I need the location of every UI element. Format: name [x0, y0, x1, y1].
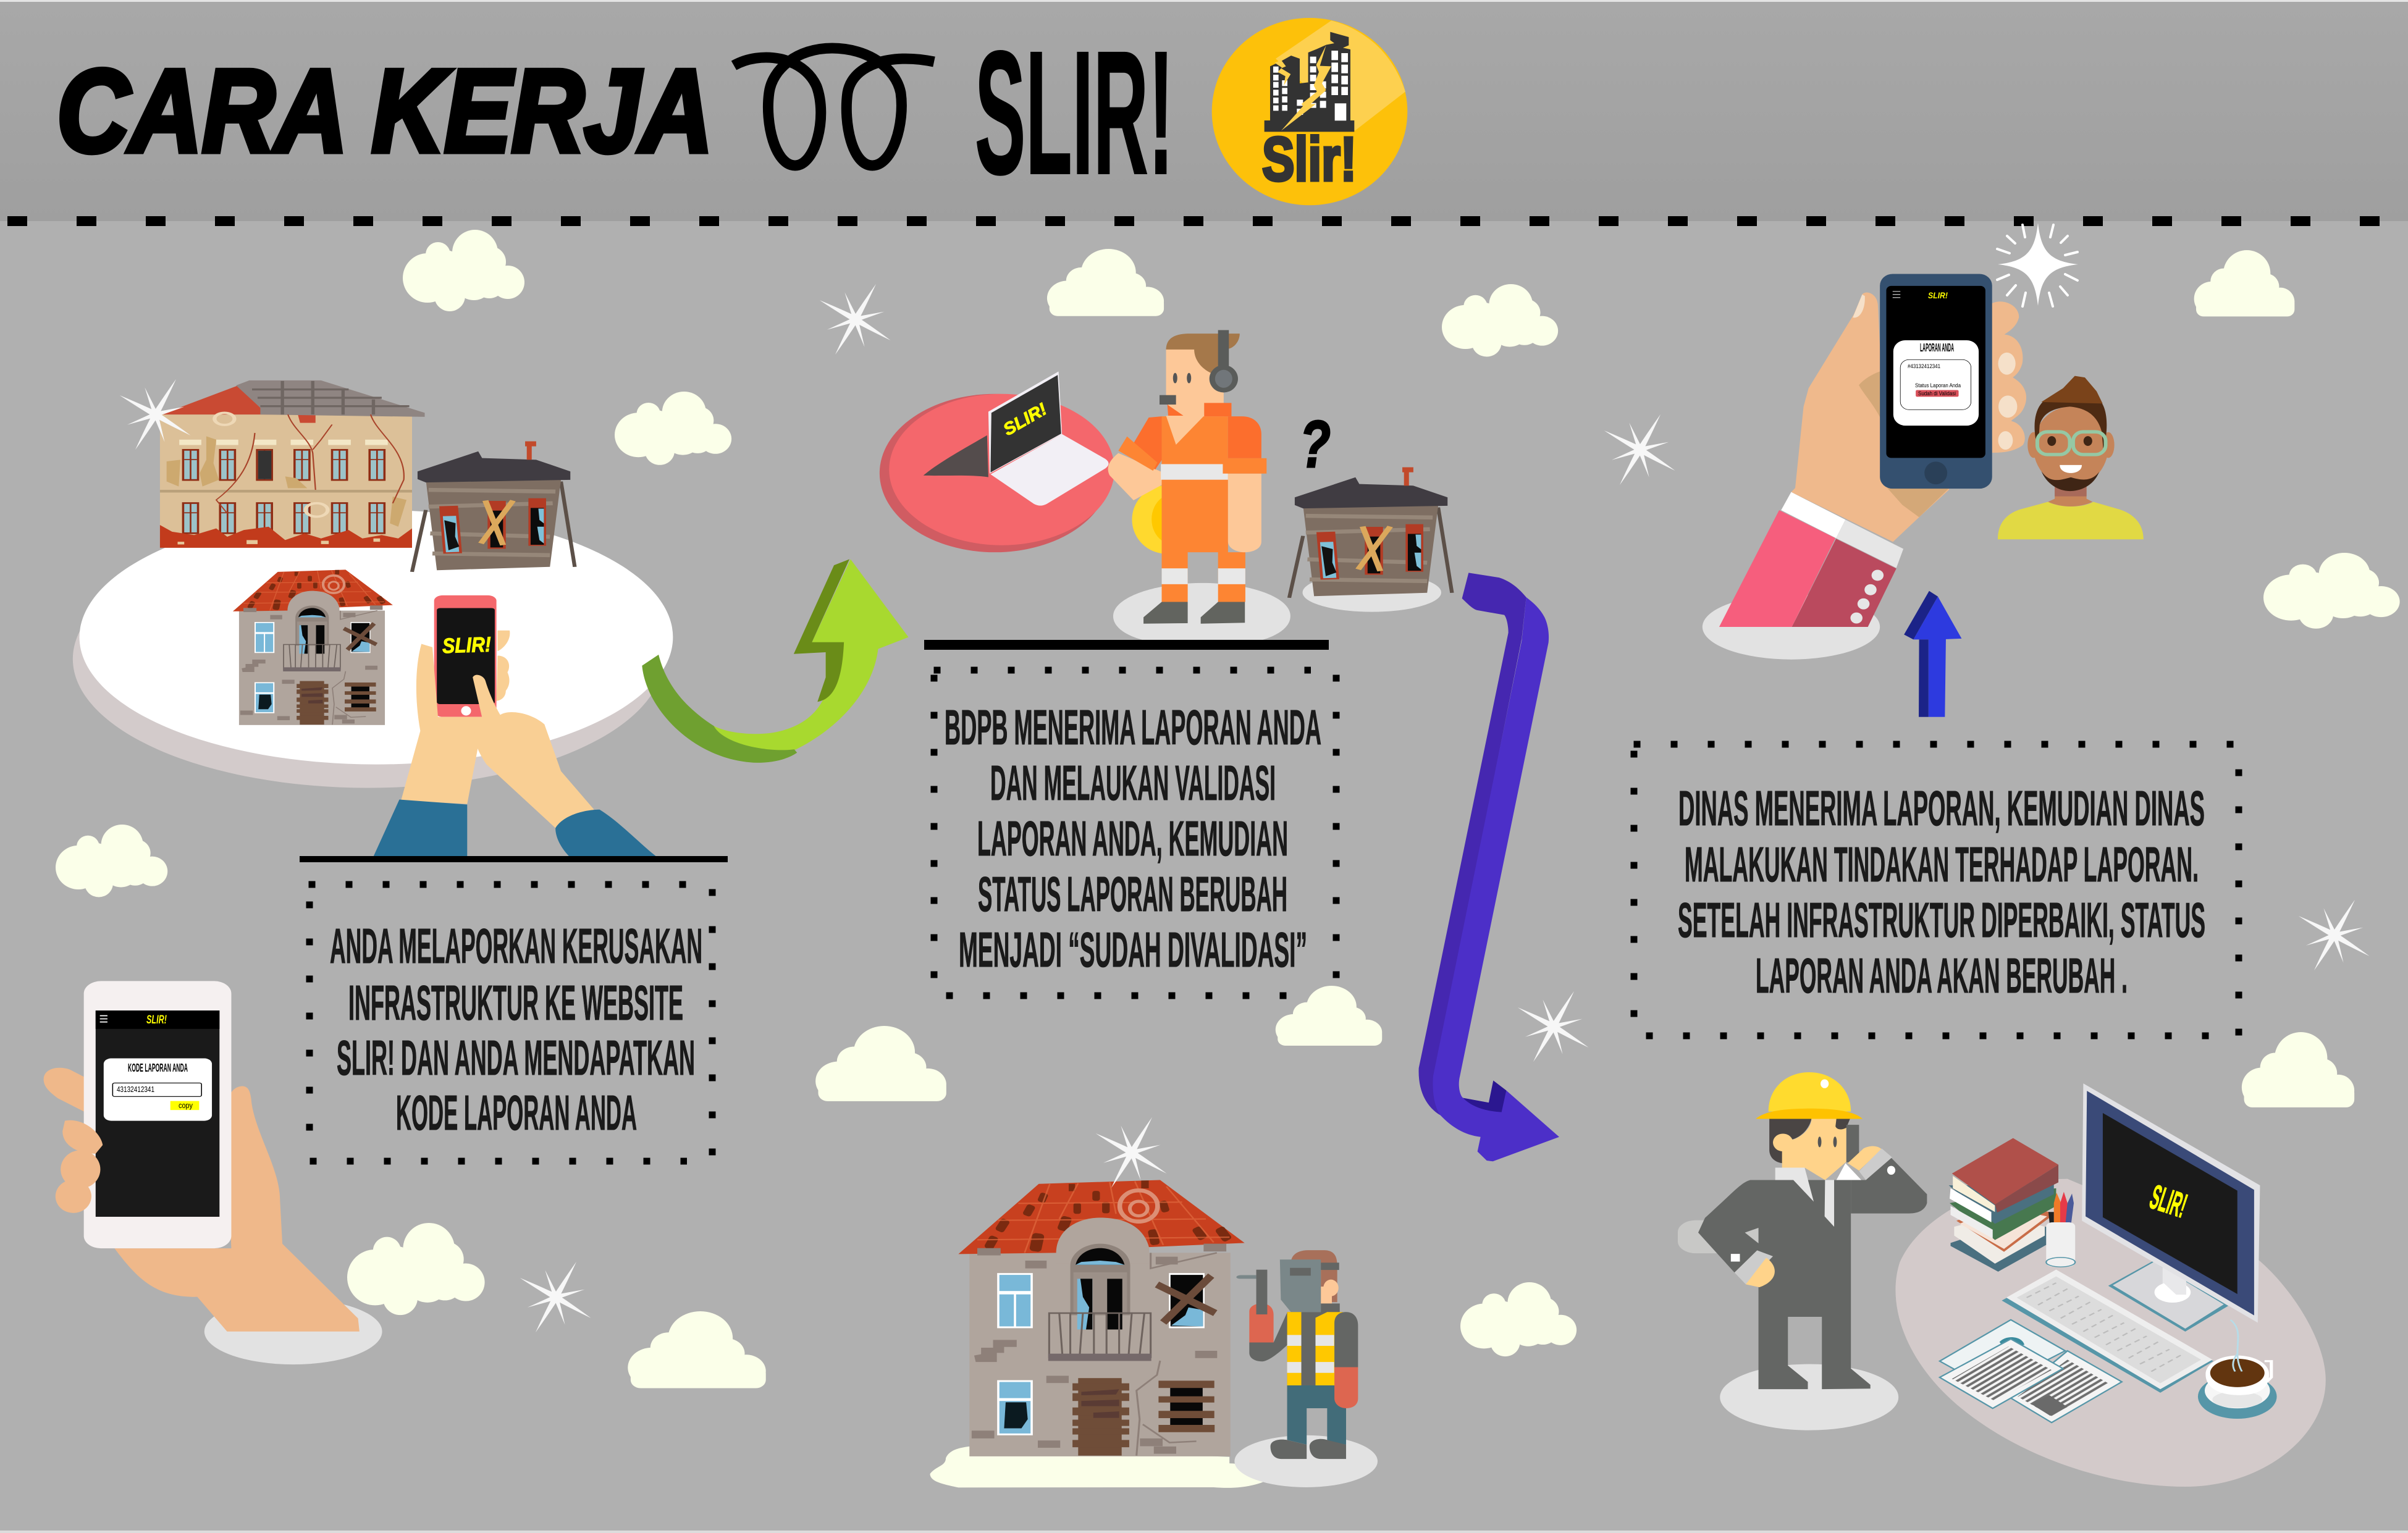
panel: step 3 house repair — [930, 1115, 1378, 1488]
text block: step 4 — [1678, 781, 2205, 1003]
documents — [1940, 1320, 2122, 1422]
cloud 11 — [347, 1223, 485, 1315]
shadow under welder — [1234, 1435, 1378, 1487]
header band — [0, 0, 2408, 221]
cloud 7 — [56, 825, 167, 897]
question mark: ? — [1300, 406, 1331, 481]
panel: step 2 operator scene — [880, 330, 1452, 640]
dotted frame: step 1 — [309, 884, 712, 1161]
dotted frame: step 2 — [934, 670, 1336, 996]
cloud 13 — [1460, 1282, 1577, 1356]
icon: four-point sparkle — [1997, 223, 2078, 306]
sparkle — [1516, 989, 1590, 1064]
panel: step 4 hand with phone status: SLIR! — [1928, 290, 1948, 300]
arrow: green curved — [642, 559, 909, 763]
arrow: purple down — [1419, 573, 1559, 1161]
welder figure — [1236, 1250, 1358, 1459]
fingers — [56, 1120, 103, 1213]
cloud 4 — [1442, 284, 1558, 356]
coffee cup — [2198, 1320, 2277, 1419]
cloud 6 — [2263, 553, 2400, 629]
operator figure — [1108, 330, 1266, 624]
text block: step 1: KODE LAPORAN ANDA — [396, 1085, 637, 1140]
text: ANDA MELAPORKAN KERUSAKAN — [330, 918, 702, 973]
damaged tan building — [160, 380, 425, 548]
engineer figure — [1678, 1072, 1927, 1389]
dashed header divider — [7, 216, 2408, 226]
shadow under engineer — [1720, 1364, 1898, 1430]
sparkle on building — [118, 377, 192, 452]
shadow ellipse — [1703, 594, 1880, 660]
laptop on red disc — [880, 371, 1114, 552]
panel: step 4 hand with phone status: LAPORAN ANDA — [1920, 342, 1954, 354]
panel: hand with phone report code: SLIR! — [146, 1014, 167, 1027]
sparkle — [518, 1260, 592, 1334]
phone body — [1880, 274, 1992, 489]
cloud 8 — [1276, 986, 1382, 1046]
helmet held — [1132, 485, 1162, 553]
laptop screen label: SLIR! — [1000, 399, 1050, 439]
sparkle — [1602, 413, 1677, 487]
dark boarded shack — [1289, 467, 1452, 598]
text block: step 2: DAN MELAUKAN VALIDASI — [990, 755, 1276, 810]
cloud 10 — [2242, 1032, 2354, 1107]
panel: step 1 report scene — [73, 377, 673, 857]
phone screen label: SLIR! — [442, 633, 492, 658]
text: STATUS LAPORAN BERUBAH — [978, 867, 1287, 922]
hand — [114, 1086, 360, 1332]
bottom edge line — [0, 1531, 2408, 1533]
shadow under shack — [1303, 573, 1441, 612]
cloud 9 — [815, 1026, 946, 1101]
icon: SLIR logo: Slir! — [1262, 125, 1357, 194]
icon: looped arrow — [734, 48, 934, 166]
sparkle — [818, 282, 892, 356]
phone body — [84, 981, 231, 1248]
sparkle — [2297, 898, 2371, 972]
panel: engineer and desk — [1678, 1072, 2326, 1487]
panel: hand with phone report code: copy — [179, 1101, 193, 1110]
text block: step 2 — [945, 700, 1321, 977]
sparkle above roof — [1094, 1115, 1168, 1190]
hand — [1791, 292, 1949, 542]
cloud base — [930, 1447, 1264, 1488]
panel: step 4 hand with phone status: Status Laporan Anda — [1915, 382, 1961, 388]
panel: step 4 hand with phone status — [1703, 223, 2144, 660]
phone in hands — [373, 595, 657, 857]
text: MENJADI “SUDAH DIVALIDASI” — [959, 922, 1307, 977]
monitor — [2082, 1083, 2260, 1332]
panel: step 4 hand with phone status: Sudah di Validasi — [1918, 390, 1956, 397]
stack of books — [1949, 1138, 2058, 1272]
panel: hand with phone report code: KODE LAPORAN ANDA — [128, 1062, 188, 1074]
cloud 1 — [403, 230, 524, 311]
panel: engineer and desk: SLIR! — [2145, 1177, 2192, 1225]
shadow ellipse — [204, 1298, 382, 1364]
panel: hand with phone report code — [44, 981, 382, 1364]
pencil cup — [2046, 1192, 2075, 1267]
heading bar: step 2 — [924, 640, 1329, 650]
panel: step 4 hand with phone status: #43132412341 — [1908, 363, 1940, 369]
text block: step 1 — [330, 918, 702, 1140]
white disc platform — [73, 510, 673, 788]
text: LAPORAN ANDA, KEMUDIAN — [977, 811, 1288, 866]
shadow under operator — [1113, 583, 1290, 640]
cloud 5 — [2194, 250, 2294, 316]
keyboard — [2002, 1269, 2213, 1393]
icon: SLIR logo — [1212, 18, 1407, 205]
heading bar: step 1 — [300, 856, 728, 862]
cloud 12 — [628, 1311, 766, 1388]
text: SLIR! — [975, 15, 1174, 211]
damaged red-roof house large — [958, 1180, 1245, 1456]
cloud 2 — [615, 392, 731, 465]
dotted frame: step 4 — [1633, 744, 2239, 1036]
text: SLIR! DAN ANDA MENDAPATKAN — [337, 1030, 695, 1085]
panel: hand with phone report code: 43132412341 — [117, 1085, 154, 1094]
text: INFRASTRUKTUR KE WEBSITE — [348, 975, 683, 1030]
arrow: blue up — [1904, 591, 1961, 717]
dark boarded shack — [412, 441, 575, 572]
damaged red-roof house small — [233, 569, 393, 725]
sleeve and cuff — [1719, 492, 1903, 627]
desk ellipse — [1895, 1179, 2326, 1487]
text: BDPB MENERIMA LAPORAN ANDA — [945, 700, 1321, 755]
cloud 3 — [1047, 249, 1164, 316]
smiling avatar — [1998, 376, 2144, 539]
title: Cara Kerja: CARA KERJA — [57, 46, 713, 177]
